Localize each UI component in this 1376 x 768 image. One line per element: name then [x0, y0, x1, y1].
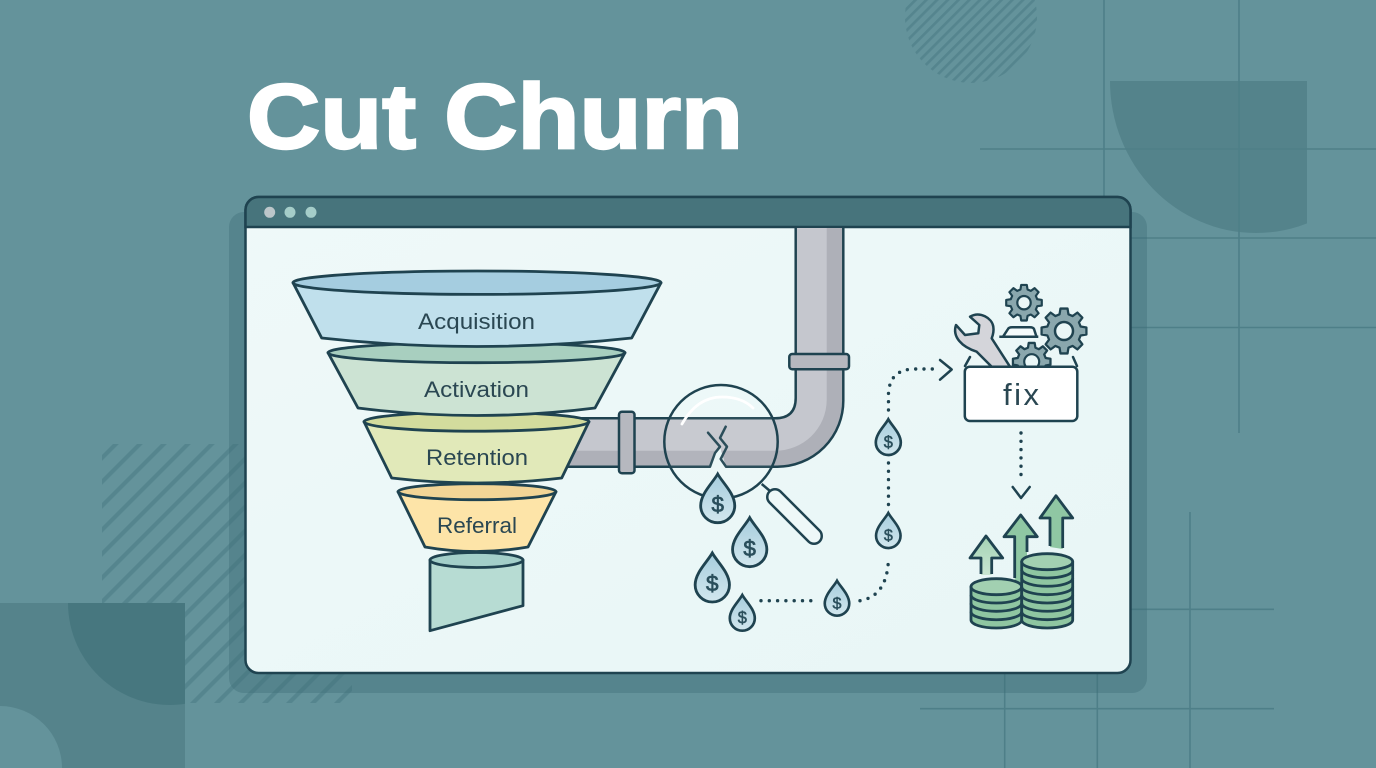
toolbox flaps — [965, 357, 1077, 366]
funnel stage: Activation — [328, 343, 625, 416]
pipe outline — [560, 228, 843, 467]
background square: lower left — [0, 603, 185, 768]
dotted flow path — [761, 369, 1021, 601]
funnel — [293, 271, 661, 631]
funnel stage: Retention: Retention — [426, 445, 528, 470]
drop 5 — [825, 581, 849, 616]
background shape: top right quarter — [1110, 81, 1307, 233]
coin stack left — [971, 579, 1022, 628]
wrench — [955, 315, 1010, 367]
funnel stage: Acquisition: Acquisition — [418, 309, 535, 334]
horizontal pipe collar — [619, 412, 634, 473]
pipe crack — [708, 433, 726, 468]
pipe shading — [560, 228, 843, 467]
drop 4: $ — [738, 609, 747, 627]
funnel stage: Referral — [398, 484, 556, 552]
coin stack right — [1022, 554, 1073, 628]
drop 6 — [876, 513, 901, 548]
funnel stage: Retention — [364, 412, 589, 483]
window shadow — [229, 212, 1147, 693]
magnifier neck — [762, 484, 770, 491]
drop 7: $ — [884, 434, 893, 452]
gear top — [1006, 285, 1042, 320]
lens — [664, 385, 778, 498]
background hatch: top circle — [905, 0, 1037, 83]
drop 7 — [876, 419, 901, 455]
growth arrow medium — [1004, 515, 1037, 585]
window control dots — [264, 207, 316, 218]
drop 6: $ — [884, 527, 893, 545]
browser window — [246, 197, 1130, 673]
pipe body — [560, 228, 843, 467]
magnifier handle — [775, 497, 814, 536]
lens highlight — [682, 397, 753, 424]
funnel spout — [430, 552, 523, 631]
drop 5: $ — [833, 594, 842, 612]
title: Cut Churn — [247, 66, 743, 168]
drop 3: $ — [706, 571, 719, 596]
gear bottom — [1012, 342, 1052, 366]
funnel stage: Acquisition — [293, 271, 661, 346]
growth arrow large — [1040, 496, 1073, 549]
toolbox box — [965, 367, 1077, 421]
growth arrows and coins — [970, 496, 1073, 628]
toolbox — [955, 285, 1086, 421]
drop 3 — [695, 553, 729, 602]
gear right — [1042, 309, 1086, 353]
background grid lines — [920, 0, 1376, 768]
drop 2: $ — [743, 536, 756, 561]
leaking pipe — [560, 228, 849, 473]
drop 2 — [733, 518, 767, 567]
drop 1: $ — [711, 492, 724, 517]
toolbox handle — [999, 327, 1038, 337]
background hatch: lower left — [102, 444, 352, 703]
drop 1 — [701, 474, 735, 523]
funnel stage: Activation: Activation — [424, 377, 529, 402]
vertical pipe collar — [789, 354, 849, 369]
window title bar — [246, 197, 1130, 227]
funnel stage: Referral: Referral — [437, 513, 517, 538]
magnifying glass — [664, 385, 814, 536]
toolbox label: fix — [1003, 377, 1040, 412]
growth arrow small — [970, 536, 1003, 575]
drop 4 — [730, 595, 755, 631]
window body — [246, 197, 1130, 673]
arrowhead to toolbox — [940, 360, 952, 380]
arrowhead to coins — [1013, 487, 1030, 498]
dollar drops — [695, 419, 901, 631]
